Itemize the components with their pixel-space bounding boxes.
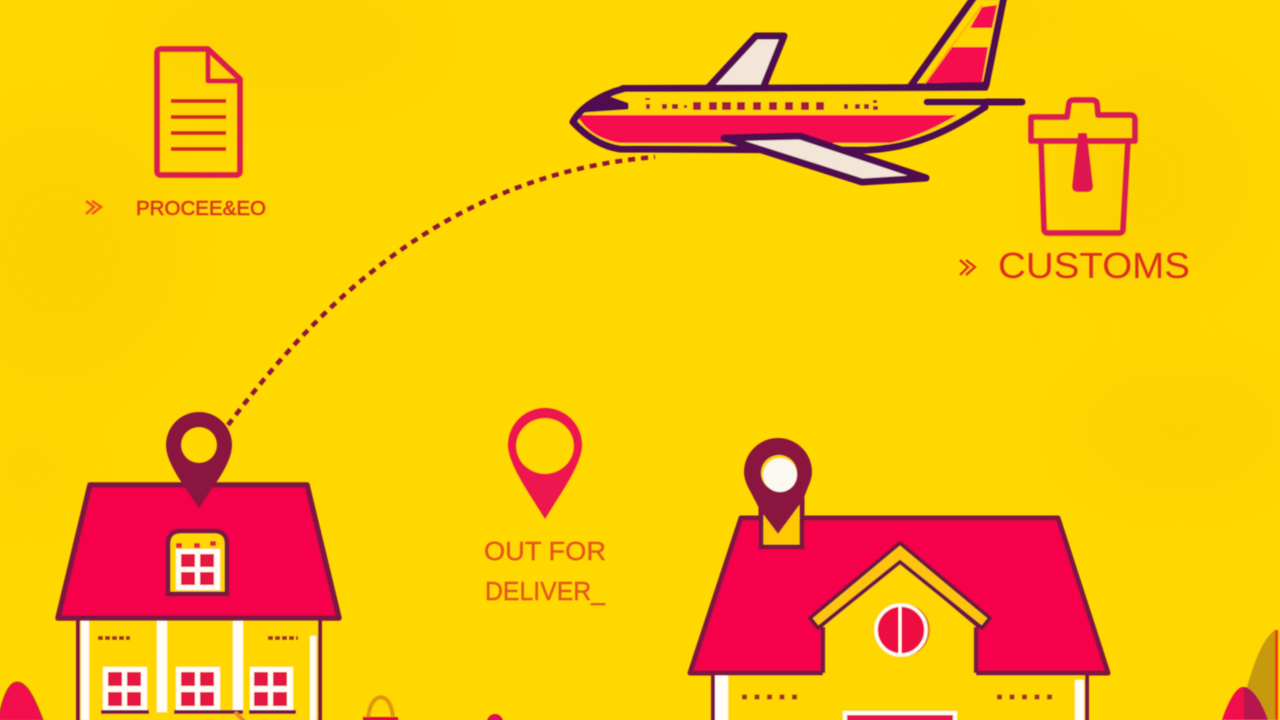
icon: shopping bag xyxy=(363,697,398,720)
destination location pin xyxy=(744,438,812,534)
plane stabilizer xyxy=(927,98,1022,106)
house: origin xyxy=(58,412,339,720)
destination door xyxy=(845,713,955,720)
destination chimney xyxy=(761,500,802,547)
house: destination xyxy=(690,438,1108,720)
origin walls xyxy=(78,618,320,720)
origin windows xyxy=(101,667,296,720)
plane windows xyxy=(645,98,878,110)
destination roof xyxy=(690,518,1108,673)
icon: document xyxy=(157,49,240,175)
origin roof xyxy=(58,485,339,618)
bush: bottom centre xyxy=(487,714,503,720)
origin location pin xyxy=(166,412,232,509)
label: customs: CUSTOMS xyxy=(998,245,1190,286)
bush: bottom right xyxy=(1222,630,1278,720)
icon: out for delivery pin xyxy=(508,408,582,519)
icon: customs box xyxy=(1031,100,1135,233)
origin dormer window xyxy=(168,531,227,594)
label: processed: PROCEE&EO xyxy=(136,197,266,220)
label: out for delivery: DELIVER_ xyxy=(485,576,606,606)
plane fuselage xyxy=(573,88,985,150)
destination round window xyxy=(876,604,930,656)
route: dotted flight path xyxy=(228,157,655,425)
destination gable xyxy=(823,563,976,668)
bush: bottom left xyxy=(0,682,43,720)
plane lower wing xyxy=(724,136,926,182)
plane tail fin xyxy=(910,0,1004,87)
label: out for delivery xyxy=(484,536,606,606)
plane upper wing xyxy=(708,36,784,88)
arrow: processed chevrons xyxy=(86,201,101,214)
label: out for delivery: OUT FOR xyxy=(484,536,606,566)
destination wall dots xyxy=(742,694,1059,700)
icon: airplane xyxy=(573,0,1022,182)
destination walls xyxy=(713,670,1087,720)
plane cockpit xyxy=(583,98,627,111)
origin wall dots xyxy=(98,636,298,640)
arrow: customs chevrons xyxy=(960,260,975,275)
